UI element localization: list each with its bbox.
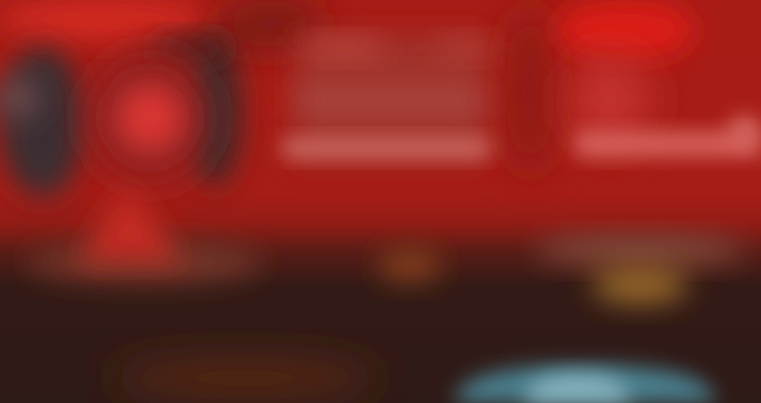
- triangle: [75, 185, 185, 262]
- base glow: [27, 242, 263, 282]
- outer dome: [455, 365, 715, 403]
- heading right: [440, 38, 490, 58]
- icon: tan glow badge: [535, 236, 745, 303]
- icon: circular dark ring diagram: [0, 36, 240, 197]
- golden lower dome: [592, 267, 688, 303]
- ring: top connector: [148, 36, 232, 60]
- icon: red triangle shape with base: [27, 185, 263, 282]
- centre right dark column: [506, 5, 554, 175]
- top centre dark zone: [215, 0, 325, 48]
- tan band: [535, 236, 745, 264]
- ring: right dark arc: [188, 38, 240, 186]
- callout glow: [570, 55, 650, 145]
- ring: grey highlight: [0, 78, 40, 118]
- ring: left dark arc: [0, 47, 84, 197]
- icon: dim orange arc bottom: [110, 356, 380, 400]
- top left bright zone: [0, 0, 210, 40]
- ring: inner dark halo: [88, 54, 212, 182]
- callout band: [575, 132, 761, 156]
- icon: orange marker: [378, 249, 442, 281]
- inner highlight: [525, 375, 630, 403]
- text block backdrop: [295, 35, 485, 160]
- icon: teal dome bottom: [455, 365, 715, 403]
- lower line: [283, 138, 490, 158]
- callout corner: [729, 116, 761, 144]
- heading left: [310, 38, 380, 58]
- ring: centre red circle: [116, 84, 184, 152]
- text block: blurred pink heading: [283, 35, 490, 160]
- panel: red band tone variations: [0, 0, 695, 175]
- top right bright zone: [555, 0, 695, 60]
- middle lines: [298, 85, 483, 117]
- text block: right pink callout: [570, 55, 761, 156]
